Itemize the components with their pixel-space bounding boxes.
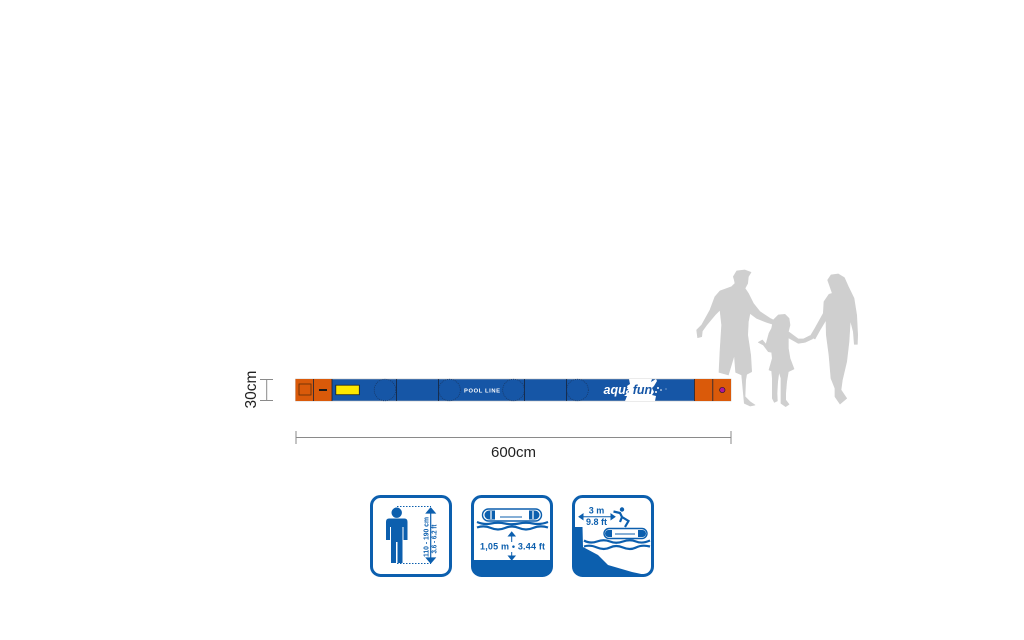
dimension: height 30cm <box>243 371 273 408</box>
silhouettes: family holding hands <box>697 270 858 407</box>
height arrow <box>426 508 435 563</box>
jumper figure <box>614 512 628 527</box>
product: pool line inflatable bar <box>296 379 731 401</box>
bar blue body <box>296 379 731 401</box>
valve circles <box>374 379 588 401</box>
height label: 30cm <box>243 371 260 408</box>
silhouette: man <box>697 270 777 406</box>
distance labels: 3 m <box>589 506 604 516</box>
waves <box>584 540 650 549</box>
right orange end <box>694 379 731 401</box>
depth label: 1,05 m • 3.44 ft <box>480 542 545 552</box>
icon: jump distance: 9.8 ft <box>586 517 607 527</box>
height range labels: 110 - 190 cm <box>424 517 430 557</box>
width label: 600cm <box>491 444 536 461</box>
floating line <box>604 528 647 538</box>
float center stripe <box>500 516 522 518</box>
black mark <box>319 389 327 391</box>
pink valve <box>720 387 725 393</box>
distance arrow <box>579 514 615 520</box>
float inner highlight <box>491 511 533 519</box>
float stripe <box>615 533 635 535</box>
floating line <box>482 509 542 521</box>
left end valve <box>299 384 311 395</box>
jumper head <box>620 507 624 512</box>
silhouette: woman <box>810 274 858 404</box>
splash droplets <box>655 387 666 393</box>
float end caps <box>484 510 540 520</box>
icon: user height <box>372 496 450 576</box>
bar chamber dividers <box>314 379 713 401</box>
yellow label <box>336 385 359 395</box>
aquafun logo: aquafun <box>604 383 652 397</box>
silhouette: girl <box>758 314 814 407</box>
waves <box>477 522 548 530</box>
dimension: width 600cm <box>296 431 731 461</box>
float end caps <box>605 530 646 537</box>
height dotted guides <box>397 506 431 564</box>
icon: user height: 3.6 - 6.2 ft <box>432 524 438 554</box>
shore slope <box>574 527 648 576</box>
seabed <box>472 560 552 576</box>
logo splash <box>624 379 657 401</box>
icon: water depth <box>472 496 552 576</box>
left orange end <box>296 379 332 401</box>
person figure <box>386 508 408 563</box>
product name text: POOL LINE <box>464 388 500 394</box>
depth arrows <box>508 532 515 560</box>
icon: jump distance <box>574 496 652 576</box>
